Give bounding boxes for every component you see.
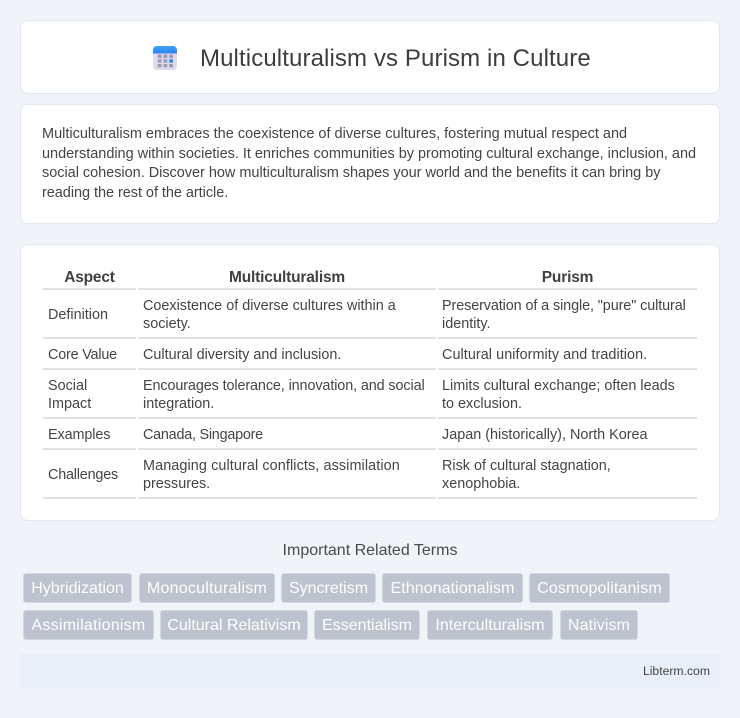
tag: Cultural Relativism bbox=[167, 617, 301, 634]
related term tags bbox=[23, 573, 670, 640]
tag: Essentialism bbox=[322, 617, 412, 634]
row: Social Impact: Limits cultural exchange; often leads bbox=[442, 378, 675, 394]
row: Definition: Preservation of a single, "pure" cultural bbox=[442, 298, 686, 314]
header card bbox=[20, 20, 720, 94]
row: Social Impact: Impact bbox=[48, 396, 91, 412]
intro card bbox=[20, 104, 720, 224]
comparison table card bbox=[20, 244, 720, 521]
tag bbox=[427, 610, 553, 640]
icon: calendar bbox=[153, 46, 177, 70]
tag: Cosmopolitanism bbox=[537, 580, 662, 597]
row: Examples: Canada, Singapore bbox=[143, 427, 263, 443]
row: Core Value: Cultural uniformity and tradition. bbox=[442, 347, 647, 363]
tag bbox=[23, 573, 132, 603]
intro text bbox=[42, 126, 696, 200]
tag bbox=[382, 573, 523, 603]
header: Purism: Purism bbox=[542, 269, 593, 286]
comparison table bbox=[43, 269, 697, 499]
tag bbox=[314, 610, 420, 640]
row: Social Impact: Social bbox=[48, 378, 87, 394]
row: Core Value bbox=[48, 347, 647, 363]
intro text: reading the rest of the article. bbox=[42, 184, 228, 200]
row: Definition: Definition bbox=[48, 307, 108, 323]
row: Definition: society. bbox=[143, 316, 191, 332]
tag: Syncretism bbox=[289, 580, 368, 597]
row: Social Impact bbox=[48, 378, 675, 412]
tag bbox=[160, 610, 308, 640]
row: Challenges: Managing cultural conflicts, assimilation bbox=[143, 458, 400, 474]
tag: Nativism bbox=[568, 617, 630, 634]
header: Aspect: Aspect bbox=[64, 269, 115, 286]
row: Core Value: Cultural diversity and inclusion. bbox=[143, 347, 341, 363]
tag bbox=[529, 573, 670, 603]
tag bbox=[23, 610, 154, 640]
title: Multiculturalism vs Purism in Culture bbox=[200, 45, 591, 72]
footer bar bbox=[20, 654, 720, 688]
heading: Important Related Terms: Important Related Terms bbox=[283, 542, 457, 559]
tag bbox=[281, 573, 376, 603]
row: Challenges: Challenges bbox=[48, 467, 118, 483]
tag bbox=[139, 573, 275, 603]
row: Definition bbox=[48, 298, 686, 332]
row: Challenges: xenophobia. bbox=[442, 476, 520, 492]
row: Examples bbox=[48, 427, 648, 443]
row: Definition: Coexistence of diverse cultures within a bbox=[143, 298, 396, 314]
row: Social Impact: to exclusion. bbox=[442, 396, 522, 412]
footer credit: Libterm.com bbox=[643, 664, 710, 678]
row: Challenges: Risk of cultural stagnation, bbox=[442, 458, 611, 474]
row: Examples: Japan (historically), North Korea bbox=[442, 427, 648, 443]
tag: Hybridization bbox=[31, 580, 124, 597]
intro text: social cohesion. Discover how multiculturalism shapes your world and the benefits it can bring by bbox=[42, 165, 660, 181]
row: Core Value: Core Value bbox=[48, 347, 117, 363]
tag bbox=[560, 610, 638, 640]
row: Challenges bbox=[48, 458, 611, 492]
row: Definition: identity. bbox=[442, 316, 491, 332]
intro text: Multiculturalism embraces the coexistence of diverse cultures, fostering mutual respect and bbox=[42, 126, 627, 142]
tag: Monoculturalism bbox=[147, 580, 267, 597]
tag: Interculturalism bbox=[435, 617, 545, 634]
row: Challenges: pressures. bbox=[143, 476, 210, 492]
tag: Ethnonationalism bbox=[390, 580, 515, 597]
header: Multiculturalism: Multiculturalism bbox=[229, 269, 345, 286]
row: Examples: Examples bbox=[48, 427, 110, 443]
tag: Assimilationism bbox=[32, 617, 146, 634]
row: Social Impact: Encourages tolerance, innovation, and social bbox=[143, 378, 425, 394]
row: Social Impact: integration. bbox=[143, 396, 214, 412]
intro text: understanding within societies. It enriches communities by promoting cultural exchange, inclusion, and bbox=[42, 146, 696, 162]
